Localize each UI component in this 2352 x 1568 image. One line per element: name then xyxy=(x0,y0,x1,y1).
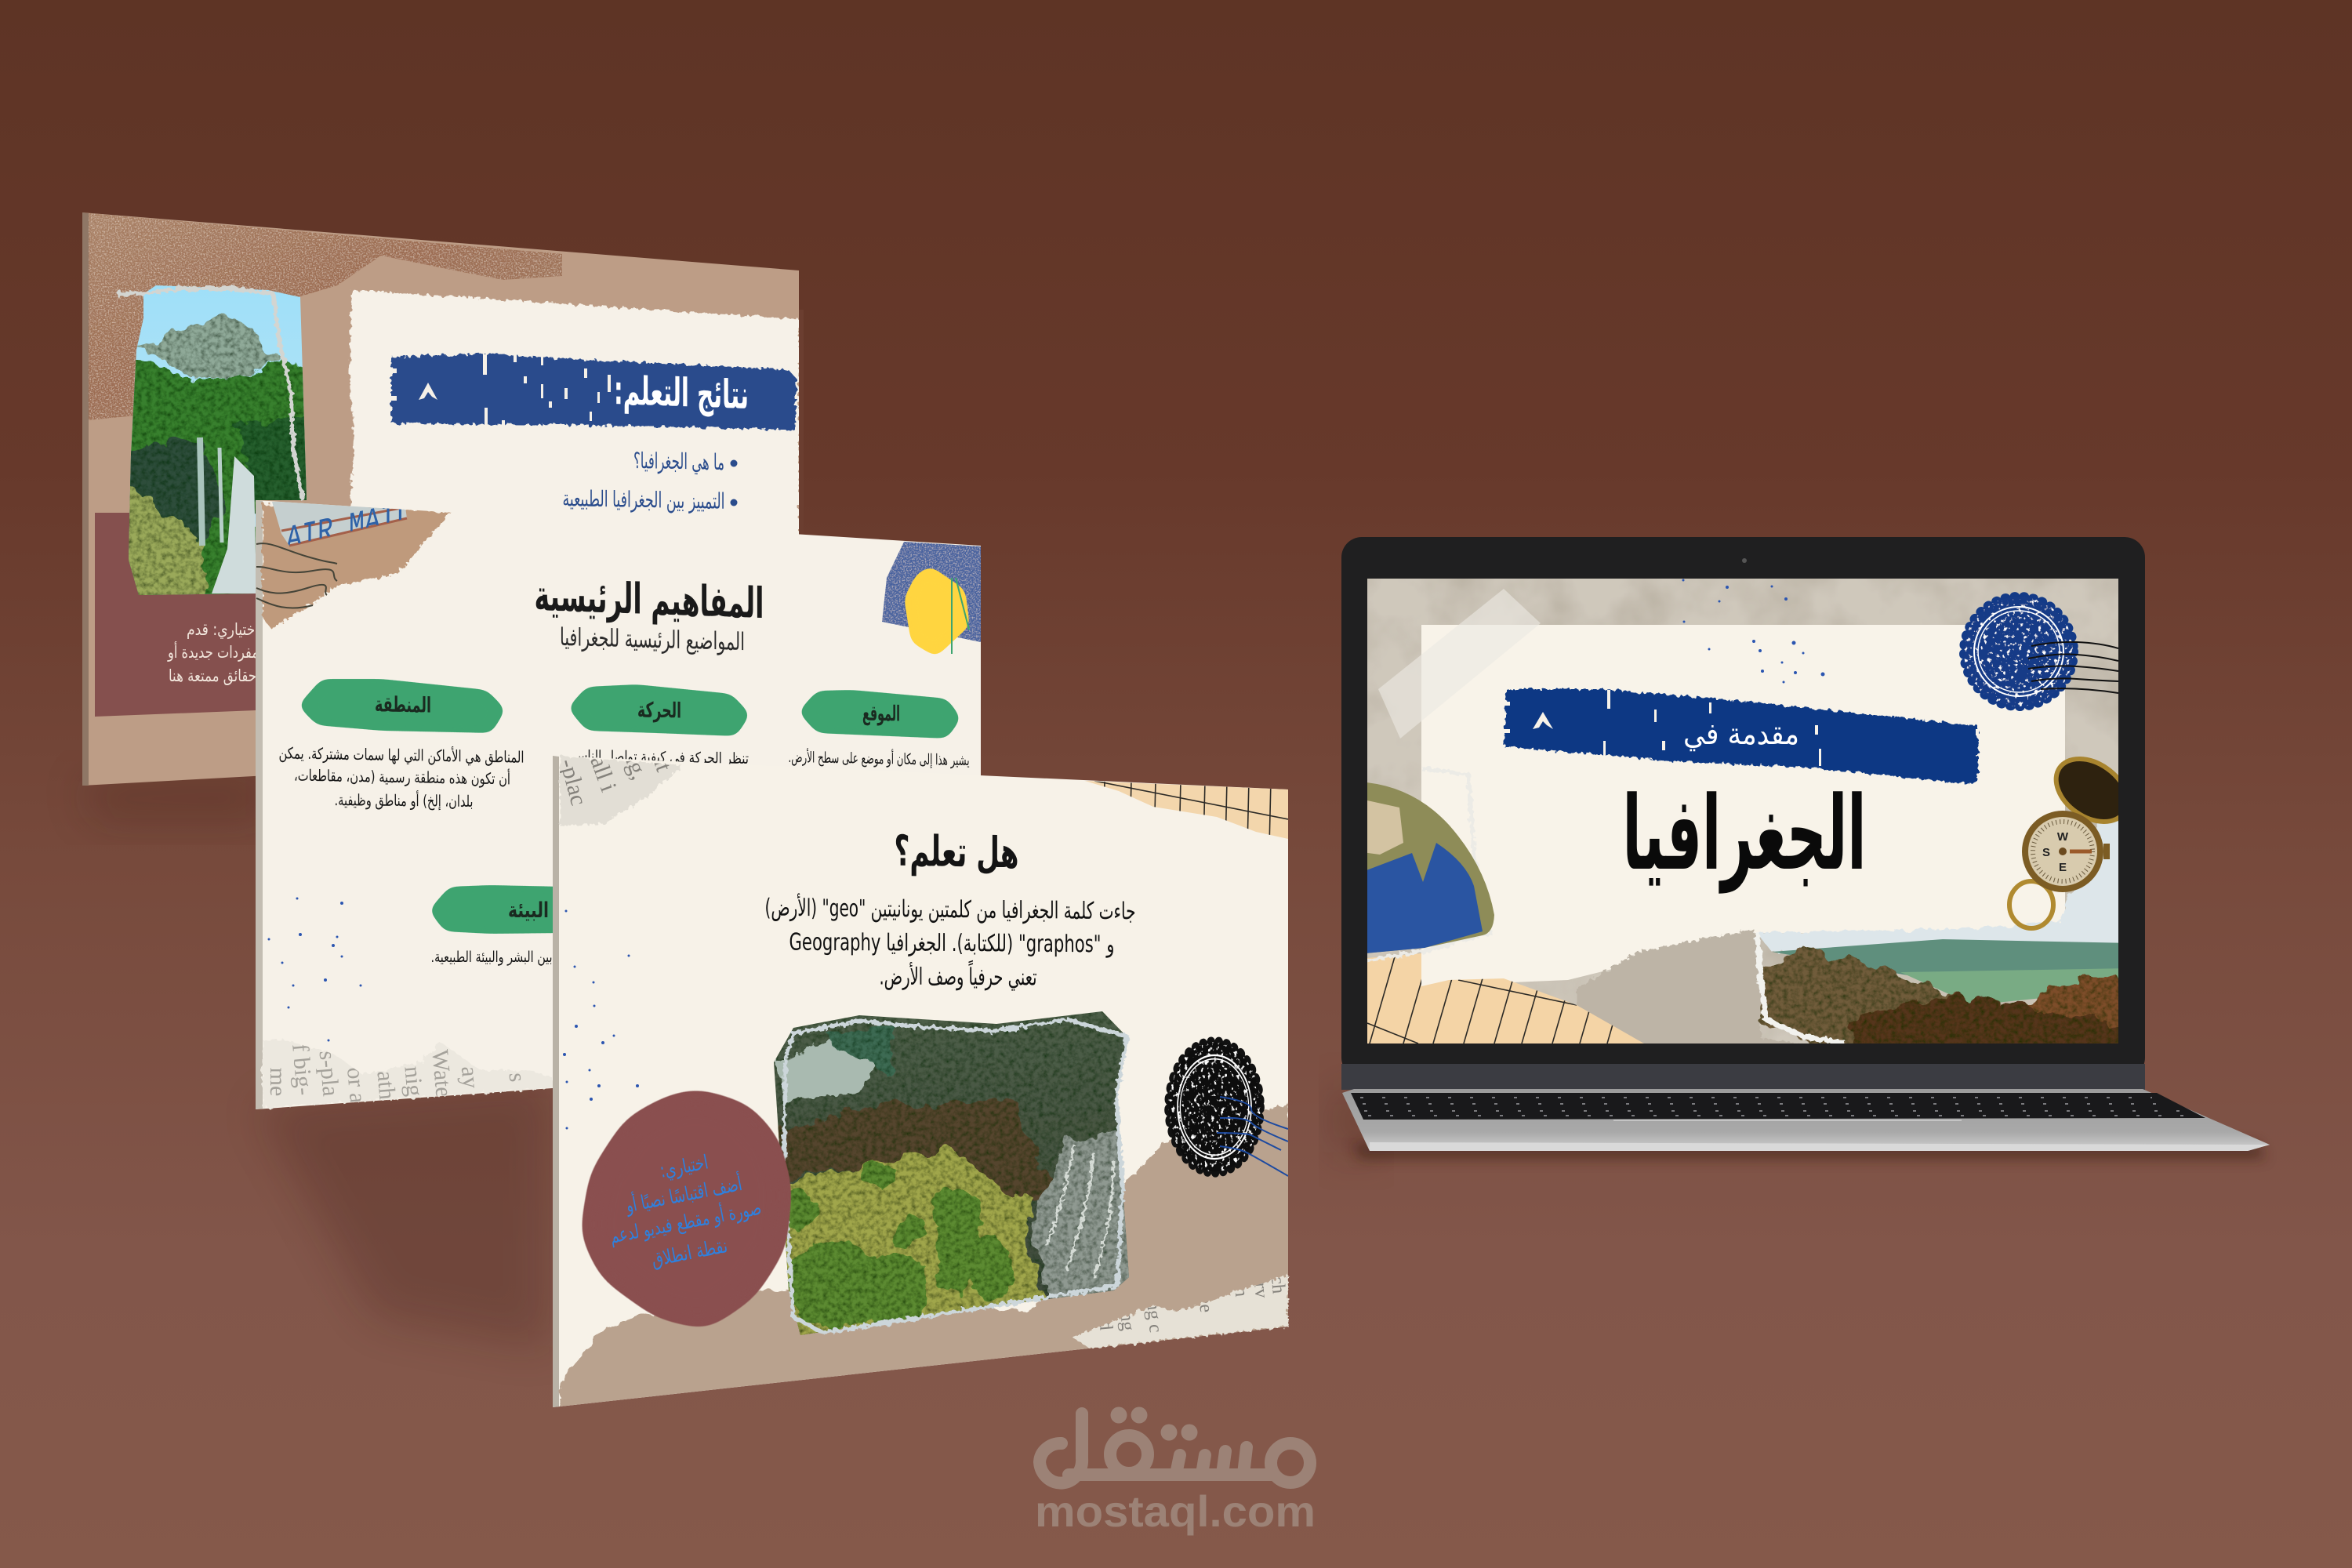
laptop base xyxy=(1342,1089,2270,1151)
newspaper scrap xyxy=(263,1040,553,1108)
maroon note text xyxy=(167,620,259,685)
blob text: اختياري: xyxy=(658,1151,710,1182)
newspaper scrap bottom: me xyxy=(1194,1289,1216,1313)
watermark logo xyxy=(1035,1406,1316,1536)
compass: W xyxy=(2057,830,2069,844)
crumpled paper background xyxy=(1367,579,2118,1044)
newspaper scrap: or a xyxy=(342,1066,371,1104)
newspaper scrap top: -plac xyxy=(554,756,592,808)
bullet list: ما هي الجغرافيا؟ xyxy=(633,448,724,475)
keyboard xyxy=(1351,1093,2205,1120)
movement description: تنظر الحركة في كيفية تواصل الناس xyxy=(573,747,749,768)
floor shadows xyxy=(82,776,1380,1348)
globe xyxy=(1356,768,1494,960)
region description: المناطق هي الأماكن التي لها سمات مشتركة. يمكن xyxy=(279,743,524,768)
coast aerial photo xyxy=(774,1011,1131,1335)
newspaper scrap top: ing, xyxy=(616,741,652,783)
newspaper scrap: ay xyxy=(456,1065,484,1090)
blob text: صورة أو مقطع فيديو لدعم xyxy=(608,1194,764,1249)
rose gold paper xyxy=(89,213,562,420)
main title: الجغرافيا xyxy=(1623,774,1866,894)
graph paper scrap xyxy=(1367,949,1644,1044)
maroon note text: حقائق ممتعة هنا xyxy=(169,666,256,685)
newspaper scrap bottom: hich xyxy=(1265,1261,1289,1294)
yellow and blue collage xyxy=(882,542,981,657)
location description: يشير هذا إلى مكان أو موضع على سطح الأرض. xyxy=(789,747,969,770)
banner mark xyxy=(419,383,437,400)
pill: location: الموقع xyxy=(862,702,900,726)
newspaper scrap top: nt xyxy=(646,749,677,775)
laptop xyxy=(1341,537,2270,1159)
slide 3 side edge xyxy=(553,756,559,1407)
blue banner xyxy=(390,351,796,430)
blob text: نقطة انطلاق xyxy=(650,1234,729,1271)
slide 3 body text xyxy=(765,892,1135,992)
slide 2 paper xyxy=(256,500,981,1109)
slide: key concepts xyxy=(256,495,981,1109)
graph paper scrap xyxy=(1085,781,1288,839)
bullet list xyxy=(563,448,737,514)
newspaper scrap bottom: and xyxy=(1094,1302,1116,1331)
pill: movement xyxy=(568,684,750,736)
newspaper scrap: s-pla xyxy=(314,1050,343,1098)
air mail torn paper xyxy=(256,495,451,630)
slide 3 title: هل تعلم؟ xyxy=(894,826,1019,877)
blue banner xyxy=(1504,689,1979,784)
maroon quote blob xyxy=(579,1088,793,1330)
newspaper scrap: Wate xyxy=(426,1048,457,1098)
region description: أن تكون هذه منطقة رسمية (مدن، مقاطعات، xyxy=(294,765,510,788)
pill: environment xyxy=(429,885,564,934)
region description: بلدان، إلخ) أو مناطق وظيفية. xyxy=(334,789,474,811)
slide 3 body text: جاءت كلمة الجغرافيا من كلمتين يونانيتين "geo" (الأرض) xyxy=(764,892,1136,925)
environment description: بين البشر والبيئة الطبيعية. xyxy=(431,949,552,966)
slide 1 kraft paper xyxy=(82,212,799,786)
slide 2 title: المفاهيم الرئيسية xyxy=(534,571,764,628)
newspaper scrap: nig xyxy=(399,1065,428,1098)
newspaper scrap: f big- xyxy=(287,1043,318,1096)
slide 3 paper xyxy=(553,756,1288,1407)
compass: E xyxy=(2059,861,2067,874)
blob text xyxy=(608,1151,764,1271)
laptop screen: intro slide xyxy=(1356,579,2140,1066)
slide 2 subtitle: المواضيع الرئيسية للجغرافيا xyxy=(560,623,745,656)
slide 3 body text: تعني حرفياً وصف الأرض. xyxy=(880,960,1036,992)
newspaper scrap: s xyxy=(504,1072,530,1083)
newspaper scrap bottom: ong xyxy=(1115,1301,1138,1331)
cream sheet xyxy=(1421,625,2065,986)
newspaper scrap bottom: ten xyxy=(1229,1273,1251,1298)
watermark url: mostaql.com xyxy=(1035,1486,1316,1536)
laptop shadow xyxy=(1352,1143,2266,1159)
landscape photo xyxy=(1753,931,2118,1044)
kraft scrap xyxy=(1576,929,1798,1044)
pill: environment: البيئة xyxy=(508,898,549,923)
newspaper scrap: ath xyxy=(372,1069,400,1101)
trackpad edge xyxy=(1613,1120,1962,1121)
kraft paper bottom xyxy=(560,1103,1301,1411)
sky and clouds xyxy=(1757,821,2132,952)
slide 1 side edge xyxy=(82,212,89,786)
pill: movement: الحركة xyxy=(637,699,681,723)
camera xyxy=(1742,558,1747,563)
cream paper xyxy=(349,290,799,549)
slide: did you know xyxy=(553,728,1301,1411)
blob text: أضف اقتباسًا نصيًا أو xyxy=(622,1170,744,1218)
newspaper scrap bottom xyxy=(1073,1273,1289,1348)
slide 2 side edge xyxy=(256,500,263,1109)
air mail torn paper: AIR MAIL xyxy=(286,495,412,561)
ink splatter xyxy=(268,897,362,1041)
maroon note text: مفردات جديدة أو xyxy=(167,641,259,662)
banner title: نتائج التعلم: xyxy=(614,368,749,419)
laptop lid xyxy=(1341,537,2145,1078)
pill: region: المنطقة xyxy=(375,692,431,718)
bullet list: التمييز بين الجغرافيا الطبيعية xyxy=(563,485,724,514)
pill: location xyxy=(798,690,961,739)
newspaper scrap bottom: ng c xyxy=(1142,1300,1166,1334)
translucent tape xyxy=(1378,589,1541,739)
newspaper scrap top: or all i xyxy=(576,728,622,795)
newspaper scrap: me xyxy=(265,1068,291,1096)
black stamp xyxy=(1168,1042,1288,1176)
logo glyphs xyxy=(1040,1406,1310,1483)
banner subtitle: مقدمة في xyxy=(1683,717,1799,751)
blue stamp xyxy=(1964,597,2118,706)
newspaper scrap top xyxy=(558,754,682,826)
compass: S xyxy=(2042,846,2050,859)
pill: region xyxy=(298,679,506,733)
compass xyxy=(2009,746,2139,928)
slide 3 body text: و "graphos" (للكتابة). الجغرافيا Geography xyxy=(789,929,1115,958)
hinge xyxy=(1341,1064,2145,1090)
ink splatter xyxy=(563,909,639,1129)
maroon note text: اختياري: قدم xyxy=(187,620,259,639)
maroon note box xyxy=(95,513,259,717)
waterfall photo xyxy=(116,285,307,595)
newspaper scrap bottom: berv xyxy=(1248,1264,1272,1299)
region description xyxy=(279,743,524,811)
ink splatter xyxy=(1682,579,1825,684)
slide: learning outcomes xyxy=(82,212,804,786)
